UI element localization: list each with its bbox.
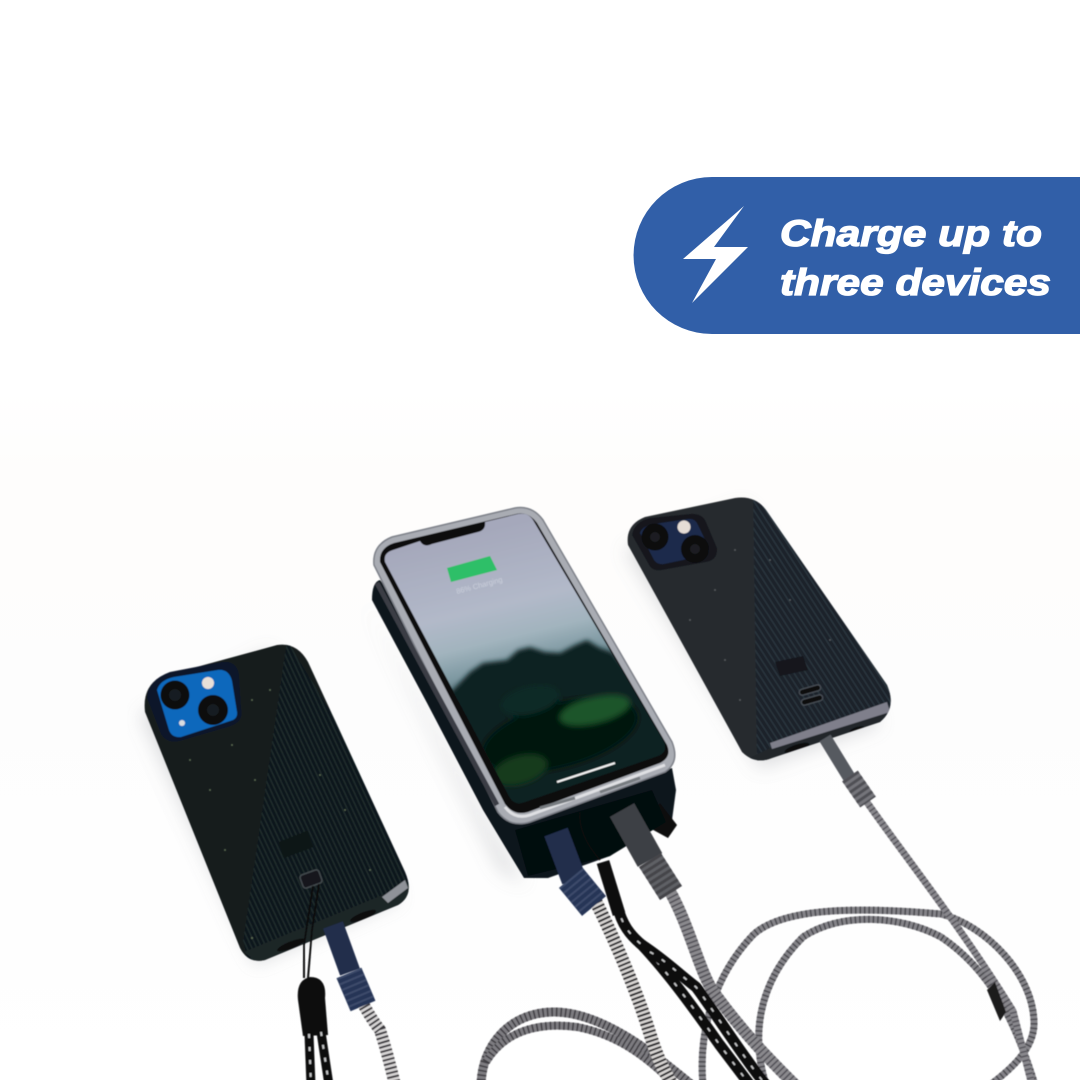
cable clasp xyxy=(987,982,1006,1021)
lanyard clasp xyxy=(298,977,328,1036)
gray connector xyxy=(825,738,852,782)
camera bump xyxy=(632,514,717,570)
case bottom highlights xyxy=(505,765,665,816)
left phone lanyard xyxy=(298,869,329,1080)
lanyard slot xyxy=(799,684,823,706)
gray cable loops xyxy=(481,910,1035,1080)
logo patch xyxy=(775,656,808,676)
battery indicator xyxy=(447,556,497,582)
bottom left loop xyxy=(481,1012,692,1080)
black lanyard strap xyxy=(617,905,750,1080)
black and white braided cable xyxy=(596,902,672,1080)
right phone cable xyxy=(825,738,1032,1080)
callout text xyxy=(780,213,1051,303)
left phone cable xyxy=(333,925,395,1080)
charging status text: 86% Charging xyxy=(455,575,503,596)
thin cord xyxy=(580,812,600,860)
ports xyxy=(277,910,376,952)
braided cable xyxy=(362,1002,395,1080)
case body xyxy=(145,645,409,961)
navy connector xyxy=(556,832,574,880)
pill shape xyxy=(634,177,1080,334)
product photo: phones and charger xyxy=(140,490,1035,1080)
center charger cables xyxy=(556,810,795,1080)
gray braided cable xyxy=(668,888,795,1080)
center phone xyxy=(370,500,680,824)
callout text: three devices xyxy=(780,262,1051,303)
case side reflection xyxy=(377,583,497,805)
home indicator xyxy=(557,763,615,782)
speckles xyxy=(189,689,371,939)
lanyard clasp xyxy=(603,862,619,914)
lanyard straps xyxy=(309,1032,329,1080)
case body xyxy=(628,498,891,760)
large loop outer xyxy=(702,910,1034,1080)
gray connector xyxy=(622,810,650,860)
speckles xyxy=(689,549,831,701)
large loop inner xyxy=(759,919,1035,1080)
lanyard loop tab xyxy=(299,869,323,889)
soft shadows xyxy=(140,505,880,965)
ribbed panel xyxy=(750,500,892,761)
icon: lightning bolt xyxy=(683,206,748,303)
clear case xyxy=(374,508,675,824)
case inner edge xyxy=(380,513,668,813)
callout text: Charge up to xyxy=(780,213,1042,254)
navy connector xyxy=(333,925,350,972)
port recess xyxy=(515,790,666,876)
lanyard strings xyxy=(304,884,319,978)
charger body xyxy=(372,580,676,878)
logo patch xyxy=(279,831,313,858)
left phone xyxy=(145,640,420,968)
wallpaper screen xyxy=(384,513,666,804)
ribbed panel xyxy=(243,640,420,968)
right phone xyxy=(628,490,900,770)
callout pill: charge up to three devices xyxy=(634,177,1080,334)
camera bump xyxy=(147,662,242,742)
ports xyxy=(784,726,864,753)
charger flap xyxy=(646,803,677,838)
charger power bank xyxy=(372,580,677,878)
braided cable xyxy=(864,798,1032,1080)
forest foliage xyxy=(450,637,666,804)
